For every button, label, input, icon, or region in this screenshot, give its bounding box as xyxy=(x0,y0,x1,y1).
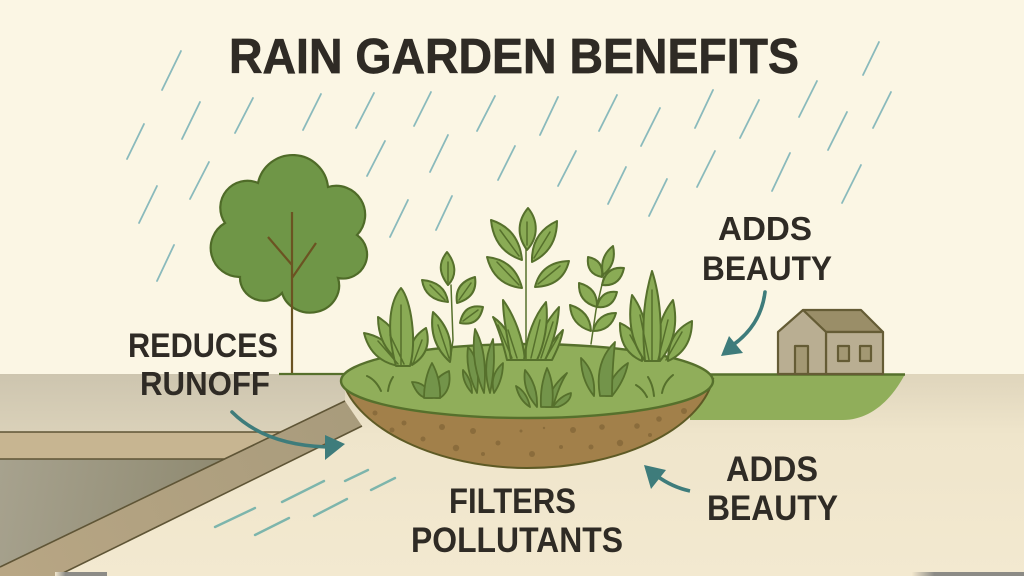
ground outlines xyxy=(0,401,362,576)
small plant C xyxy=(516,368,571,407)
water flow dashes xyxy=(215,470,395,535)
label: adds beauty bottom xyxy=(707,450,838,528)
title: RAIN GARDEN BENEFITS xyxy=(229,30,799,84)
small plant D xyxy=(581,342,628,396)
ground xyxy=(0,374,1024,576)
label: adds beauty top: BEAUTY xyxy=(702,250,832,288)
label: filters pollutants: FILTERS xyxy=(449,482,576,521)
left pavement xyxy=(0,374,345,432)
plant: left stem xyxy=(422,252,483,362)
label: reduces runoff: RUNOFF xyxy=(140,365,270,402)
soil specks xyxy=(372,408,687,457)
icon: house xyxy=(778,310,883,374)
label: filters pollutants: POLLUTANTS xyxy=(411,521,623,560)
icon: tree xyxy=(211,155,367,374)
small plant B xyxy=(463,329,503,393)
arrow: runoff into garden xyxy=(232,412,345,460)
label: adds beauty top: ADDS xyxy=(718,210,812,247)
left ground line xyxy=(279,373,345,375)
label: adds beauty bottom: BEAUTY xyxy=(707,489,838,528)
plant: tall centre xyxy=(487,208,569,360)
plants xyxy=(364,208,692,407)
grey basin xyxy=(0,459,224,567)
plant: right fern xyxy=(570,246,624,344)
planted top surface xyxy=(341,344,713,418)
arrow: adds beauty bottom xyxy=(644,465,690,491)
diagonal channel xyxy=(0,401,362,576)
grass sprigs xyxy=(367,375,673,397)
label: adds beauty top xyxy=(702,210,832,288)
lawn on right xyxy=(690,374,905,420)
plant: left clump xyxy=(364,288,428,366)
plant: right clump xyxy=(620,271,692,361)
rain streaks xyxy=(127,42,891,281)
arrow: adds beauty top xyxy=(721,292,765,356)
label: filters pollutants xyxy=(411,482,623,560)
label: reduces runoff xyxy=(128,327,278,402)
label: adds beauty bottom: ADDS xyxy=(726,450,818,489)
bottom strip right xyxy=(912,572,1024,576)
soil basin xyxy=(342,379,713,468)
tan band xyxy=(0,432,281,459)
bottom strip left xyxy=(55,572,107,576)
label: reduces runoff: REDUCES xyxy=(128,327,278,365)
small plant A xyxy=(412,363,450,398)
rain garden bowl xyxy=(341,344,713,468)
